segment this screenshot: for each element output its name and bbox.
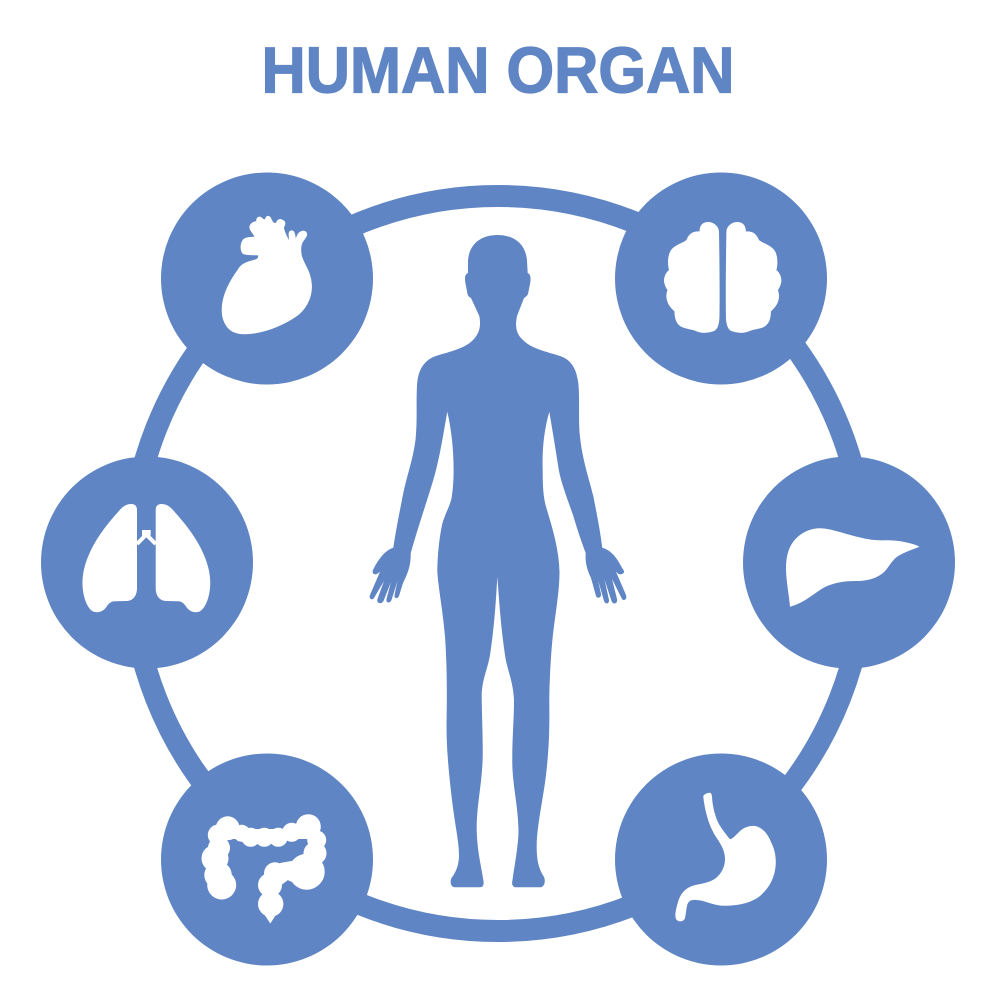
connecting ring [130,196,866,931]
panel: liver [743,456,955,668]
panel: colon [161,754,373,966]
icon: brain [664,222,781,333]
icon: heart [222,216,312,334]
panel: brain [615,172,827,384]
icon: stomach [675,793,776,921]
panel: stomach [615,754,827,966]
panel: lungs [41,456,253,668]
icon: lungs [82,504,210,612]
panel: heart [161,172,373,384]
icon: liver [786,528,920,607]
icon: colon [202,814,326,924]
icon: human body silhouette [370,235,626,887]
title: HUMAN ORGAN [262,34,734,106]
